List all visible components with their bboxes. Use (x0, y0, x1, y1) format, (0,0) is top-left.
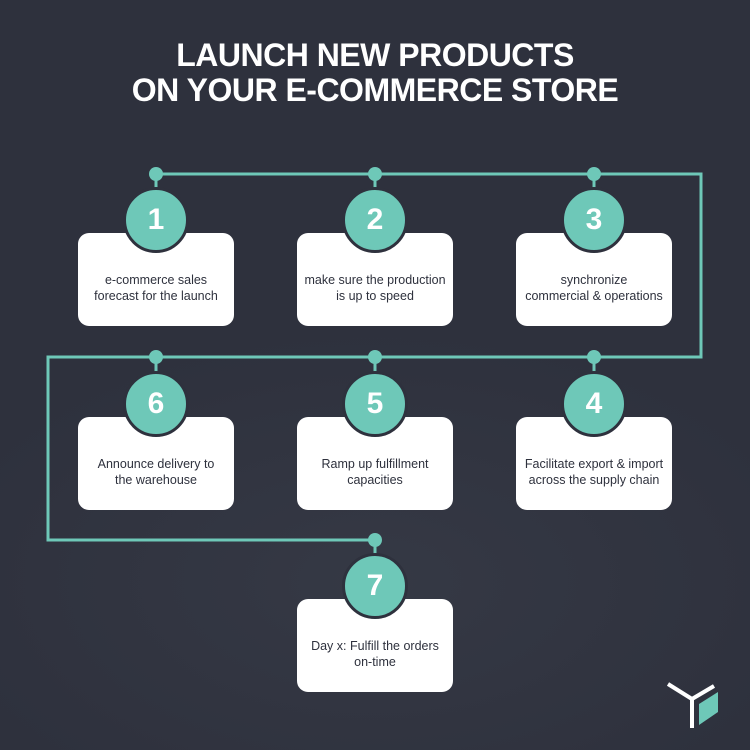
title (132, 37, 618, 108)
step 3: synchronize (561, 272, 627, 286)
step 4: across the supply chain (529, 472, 659, 486)
step 7 number: 7 (367, 569, 383, 602)
step 6: Announce delivery to (98, 456, 214, 470)
step 6 number (123, 371, 189, 437)
step 1: forecast for the launch (94, 288, 218, 302)
step 7: Day x: Fulfill the orders (311, 638, 439, 652)
step 4: Facilitate export & import (525, 456, 663, 470)
step 3 number (561, 187, 627, 253)
step 2: make sure the production (304, 272, 446, 286)
step 3 number: 3 (586, 203, 602, 236)
step 1 number: 1 (148, 203, 164, 236)
step 1: e-commerce sales (105, 272, 207, 286)
step 6 (78, 417, 234, 510)
step 1 (78, 233, 234, 326)
step 6: the warehouse (115, 472, 197, 486)
step 4 number: 4 (586, 387, 602, 420)
step 3: commercial & operations (525, 288, 663, 302)
step 6 number: 6 (148, 387, 164, 420)
step 7 number (342, 553, 408, 619)
step 2: is up to speed (336, 288, 414, 302)
step 4 (516, 417, 672, 510)
step 5: Ramp up fulfillment (322, 456, 428, 470)
title: ON YOUR E-COMMERCE STORE (132, 72, 618, 108)
step 7: on-time (354, 654, 396, 668)
step 1 number (123, 187, 189, 253)
step 5: capacities (347, 472, 403, 486)
step 2 number (342, 187, 408, 253)
step 5 number (342, 371, 408, 437)
title: LAUNCH NEW PRODUCTS (176, 37, 574, 73)
step 4 number (561, 371, 627, 437)
step 3 (516, 233, 672, 326)
step 5 (297, 417, 453, 510)
logo (667, 682, 718, 728)
step 7 (297, 599, 453, 692)
step 5 number: 5 (367, 387, 383, 420)
step 2 number: 2 (367, 203, 383, 236)
step 2 (297, 233, 453, 326)
